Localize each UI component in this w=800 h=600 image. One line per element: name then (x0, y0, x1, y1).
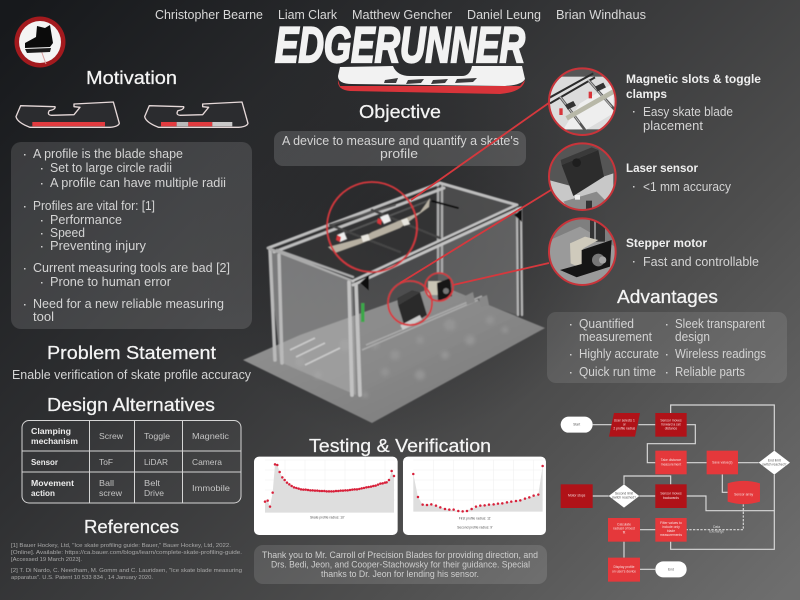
references text (11, 543, 242, 581)
step: sensor moves forward: distance (665, 427, 677, 431)
chart: skate profile single radius (254, 457, 398, 535)
data exchange label: Exchange (709, 530, 724, 534)
blade holder (328, 198, 430, 253)
table: design alternatives: ToF (99, 457, 113, 467)
table: design alternatives: screw (99, 488, 123, 498)
references text: [Accessed 19 March 2023]. (11, 557, 82, 563)
references text: [1] Bauer Hockey, Ltd, "Ice skate profiling guide: Bauer," Bauer Hockey, Ltd, 2022. (11, 543, 231, 549)
panel: motivation: A profile is the blade shape (33, 147, 183, 161)
panel: acknowledgements: Drs. Bedi, Jeon, and Cooper-Stachowsky for their guidance. Special (271, 560, 530, 570)
icon: skate logo (14, 16, 66, 68)
step: motor stops: Motor stops (568, 494, 586, 498)
icon: blade profiles (16, 102, 248, 127)
panel: advantages (547, 312, 787, 383)
start terminal (561, 417, 593, 433)
feature: magnetic slots: Easy skate blade (643, 105, 733, 119)
decision: second limit (609, 484, 639, 508)
table: design alternatives: Drive (144, 488, 164, 498)
flowchart (561, 405, 790, 582)
decision: second limit: Second limit (615, 492, 633, 496)
heading: Objective: Objective (359, 101, 441, 122)
heading: Design Alternatives: Design Alternatives (47, 394, 215, 415)
references text: apparatus". U.S. Patent 10 533 834 , 14 January 2020. (11, 575, 153, 581)
panel: motivation: tool (33, 310, 54, 324)
table: design alternatives: Ball (99, 478, 114, 488)
panel: advantages: measurement (579, 330, 652, 344)
decision: end limit (759, 451, 790, 475)
decision: second limit: switch reached? (612, 496, 636, 500)
step: take measurement: Take distance (661, 458, 681, 462)
panel: motivation: Performance (50, 213, 122, 227)
panel: objective (274, 131, 526, 166)
step: filter values: measurements (660, 533, 682, 537)
panel: acknowledgements (254, 545, 547, 584)
icon: magnetic clamp detail (548, 68, 617, 135)
panel: motivation: Current measuring tools are bad [2] (33, 261, 230, 275)
input step: User selects 1 (614, 419, 635, 423)
table: design alternatives (22, 420, 241, 503)
data store: sensor array (728, 481, 760, 504)
panel: motivation: Prone to human error (50, 275, 171, 289)
title: EdgeRunner logo: EDGERUNNER (275, 17, 525, 73)
data exchange label: Data (713, 525, 720, 529)
panel: motivation: Need for a new reliable measuring (33, 297, 224, 311)
table: design alternatives: Clamping (31, 426, 71, 436)
panel: motivation: Profiles are vital for: [1] (33, 199, 155, 213)
team names (155, 8, 646, 22)
feature: magnetic slots (626, 72, 761, 133)
chart: skate profile two radii: Second profile radius: 9' (457, 526, 493, 530)
step: filter values (655, 518, 687, 542)
chart: skate profile two radii (403, 457, 546, 535)
panel: acknowledgements: thanks to Dr. Jeon for lending his sensor. (321, 569, 479, 580)
rails and carriage (361, 292, 489, 350)
step: calculate radius (608, 518, 640, 542)
panel: advantages: Wireless readings (675, 347, 766, 361)
feature: magnetic slots: Magnetic slots & toggle (626, 72, 761, 86)
step: save values: Save value(s) (712, 461, 732, 465)
feature: stepper motor: Fast and controllable (643, 255, 759, 269)
step: calculate radius: radius/i of best (613, 527, 635, 531)
panel: advantages: Quantified (579, 317, 634, 331)
feature: laser sensor: <1 mm accuracy (643, 180, 732, 194)
panel: advantages: Highly accurate (579, 347, 659, 361)
decision: end limit: End limit (768, 458, 781, 462)
step: filter values: include only (662, 525, 680, 529)
panel: acknowledgements: Thank you to Mr. Carroll of Precision Blades for providing direction, and (262, 550, 538, 561)
end terminal (655, 561, 687, 577)
feature: magnetic slots: placement (643, 119, 704, 133)
panel: motivation: Preventing injury (50, 239, 147, 253)
table: design alternatives: Immobile (192, 483, 230, 493)
stepper motor (428, 278, 452, 301)
title: EdgeRunner logo (275, 17, 525, 94)
table: design alternatives: Magnetic (192, 431, 229, 441)
decision: end limit: switch reached? (762, 462, 786, 466)
laser sensor on carriage (397, 290, 427, 330)
data store: sensor array: Sensor array (734, 492, 754, 496)
table: design alternatives: Sensor (31, 457, 59, 467)
heading: Motivation: Motivation (86, 67, 177, 88)
chart: skate profile single radius: Skate profile radius: 10' (310, 515, 345, 519)
input step: 2 profile radius (613, 427, 636, 431)
heading: Problem Statement: Problem Statement (47, 342, 216, 363)
end terminal: End (668, 567, 674, 571)
problem statement text: Enable verification of skate profile accuracy (12, 368, 252, 382)
flowchart connectors (593, 405, 774, 569)
panel: motivation: Speed (50, 226, 85, 240)
panel: advantages: design (675, 330, 710, 344)
step: filter values: blade (667, 529, 675, 533)
step: take measurement (655, 451, 687, 474)
start terminal: Start (573, 423, 580, 427)
team names: Liam Clark (278, 8, 338, 22)
data exchange label (709, 525, 724, 534)
step: sensor moves forward (655, 413, 687, 437)
table: design alternatives: mechanism (31, 436, 78, 446)
step: sensor moves backwards: backwards (663, 496, 679, 500)
input step (609, 413, 640, 437)
heading: Testing & Verification: Testing & Verification (309, 435, 491, 456)
arrow: callout leaders (400, 100, 553, 285)
feature: laser sensor (626, 161, 732, 194)
references text: [Online]. Available: https://ca.bauer.com/blogs/learn/complete-skate-profiling-guide. (11, 550, 242, 556)
panel: objective: A device to measure and quantify a skate's (282, 134, 519, 148)
step: filter values: Filter values to (660, 521, 682, 525)
detail circles (548, 68, 617, 287)
charts (254, 457, 546, 535)
step: sensor moves backwards (655, 484, 687, 508)
device render (243, 182, 545, 423)
step: sensor moves backwards: Sensor moves (660, 492, 682, 496)
base plate (243, 285, 545, 423)
feature: laser sensor: Laser sensor (626, 161, 698, 175)
step: calculate radius: fit (623, 531, 625, 535)
step: sensor moves forward: Sensor moves (660, 418, 682, 422)
panel: objective: profile (380, 147, 418, 161)
step: save values (707, 451, 738, 474)
team names: Christopher Bearne (155, 8, 263, 22)
heading: Advantages: Advantages (617, 286, 718, 307)
callout circles on device (327, 182, 453, 325)
feature: stepper motor: Stepper motor (626, 236, 707, 250)
team names: Brian Windhaus (556, 8, 646, 22)
table: design alternatives: LiDAR (144, 457, 168, 467)
step: motor stops (561, 484, 593, 508)
step: display profile: on user's device (612, 569, 636, 573)
panel: motivation: A profile can have multiple radii (50, 176, 226, 190)
panel: motivation: Set to large circle radii (50, 161, 172, 175)
panel: motivation (11, 142, 252, 329)
table: design alternatives: Camera (192, 457, 222, 467)
panel: advantages: Reliable parts (675, 365, 745, 379)
step: calculate radius: Calculate (617, 523, 631, 527)
blade with multiple radii (145, 102, 248, 127)
step: take measurement: measurement (661, 462, 681, 466)
panel: advantages: Sleek transparent (675, 317, 765, 331)
glass enclosure (268, 183, 518, 395)
feature: magnetic slots: clamps (626, 87, 667, 101)
chart: skate profile two radii: First profile radius: 11' (459, 517, 492, 521)
table: design alternatives: action (31, 488, 55, 498)
table: design alternatives: Toggle (144, 431, 170, 441)
icon: laser sensor detail (548, 143, 616, 213)
table: design alternatives: Belt (144, 478, 161, 488)
heading: References: References (84, 516, 179, 537)
logo blade (338, 66, 525, 94)
aluminium frame (268, 183, 522, 395)
table: design alternatives: Movement (31, 478, 74, 488)
step: display profile: Display profile (614, 565, 635, 569)
team names: Daniel Leung (467, 8, 541, 22)
panel: advantages: Quick run time (579, 365, 656, 379)
feature: stepper motor (626, 236, 759, 269)
references text: [2] T. Di Nardo, C. Needham, M. Gomm and C. Lauridsen, "Ice skate blade measuring (11, 568, 242, 574)
input step: or (623, 423, 627, 427)
team names: Matthew Gencher (352, 8, 452, 22)
icon: stepper motor detail (549, 218, 616, 287)
step: sensor moves forward: forward a set (661, 422, 681, 426)
step: display profile (608, 558, 640, 582)
blade with single radius (16, 102, 119, 127)
table: design alternatives: Screw (99, 431, 124, 441)
